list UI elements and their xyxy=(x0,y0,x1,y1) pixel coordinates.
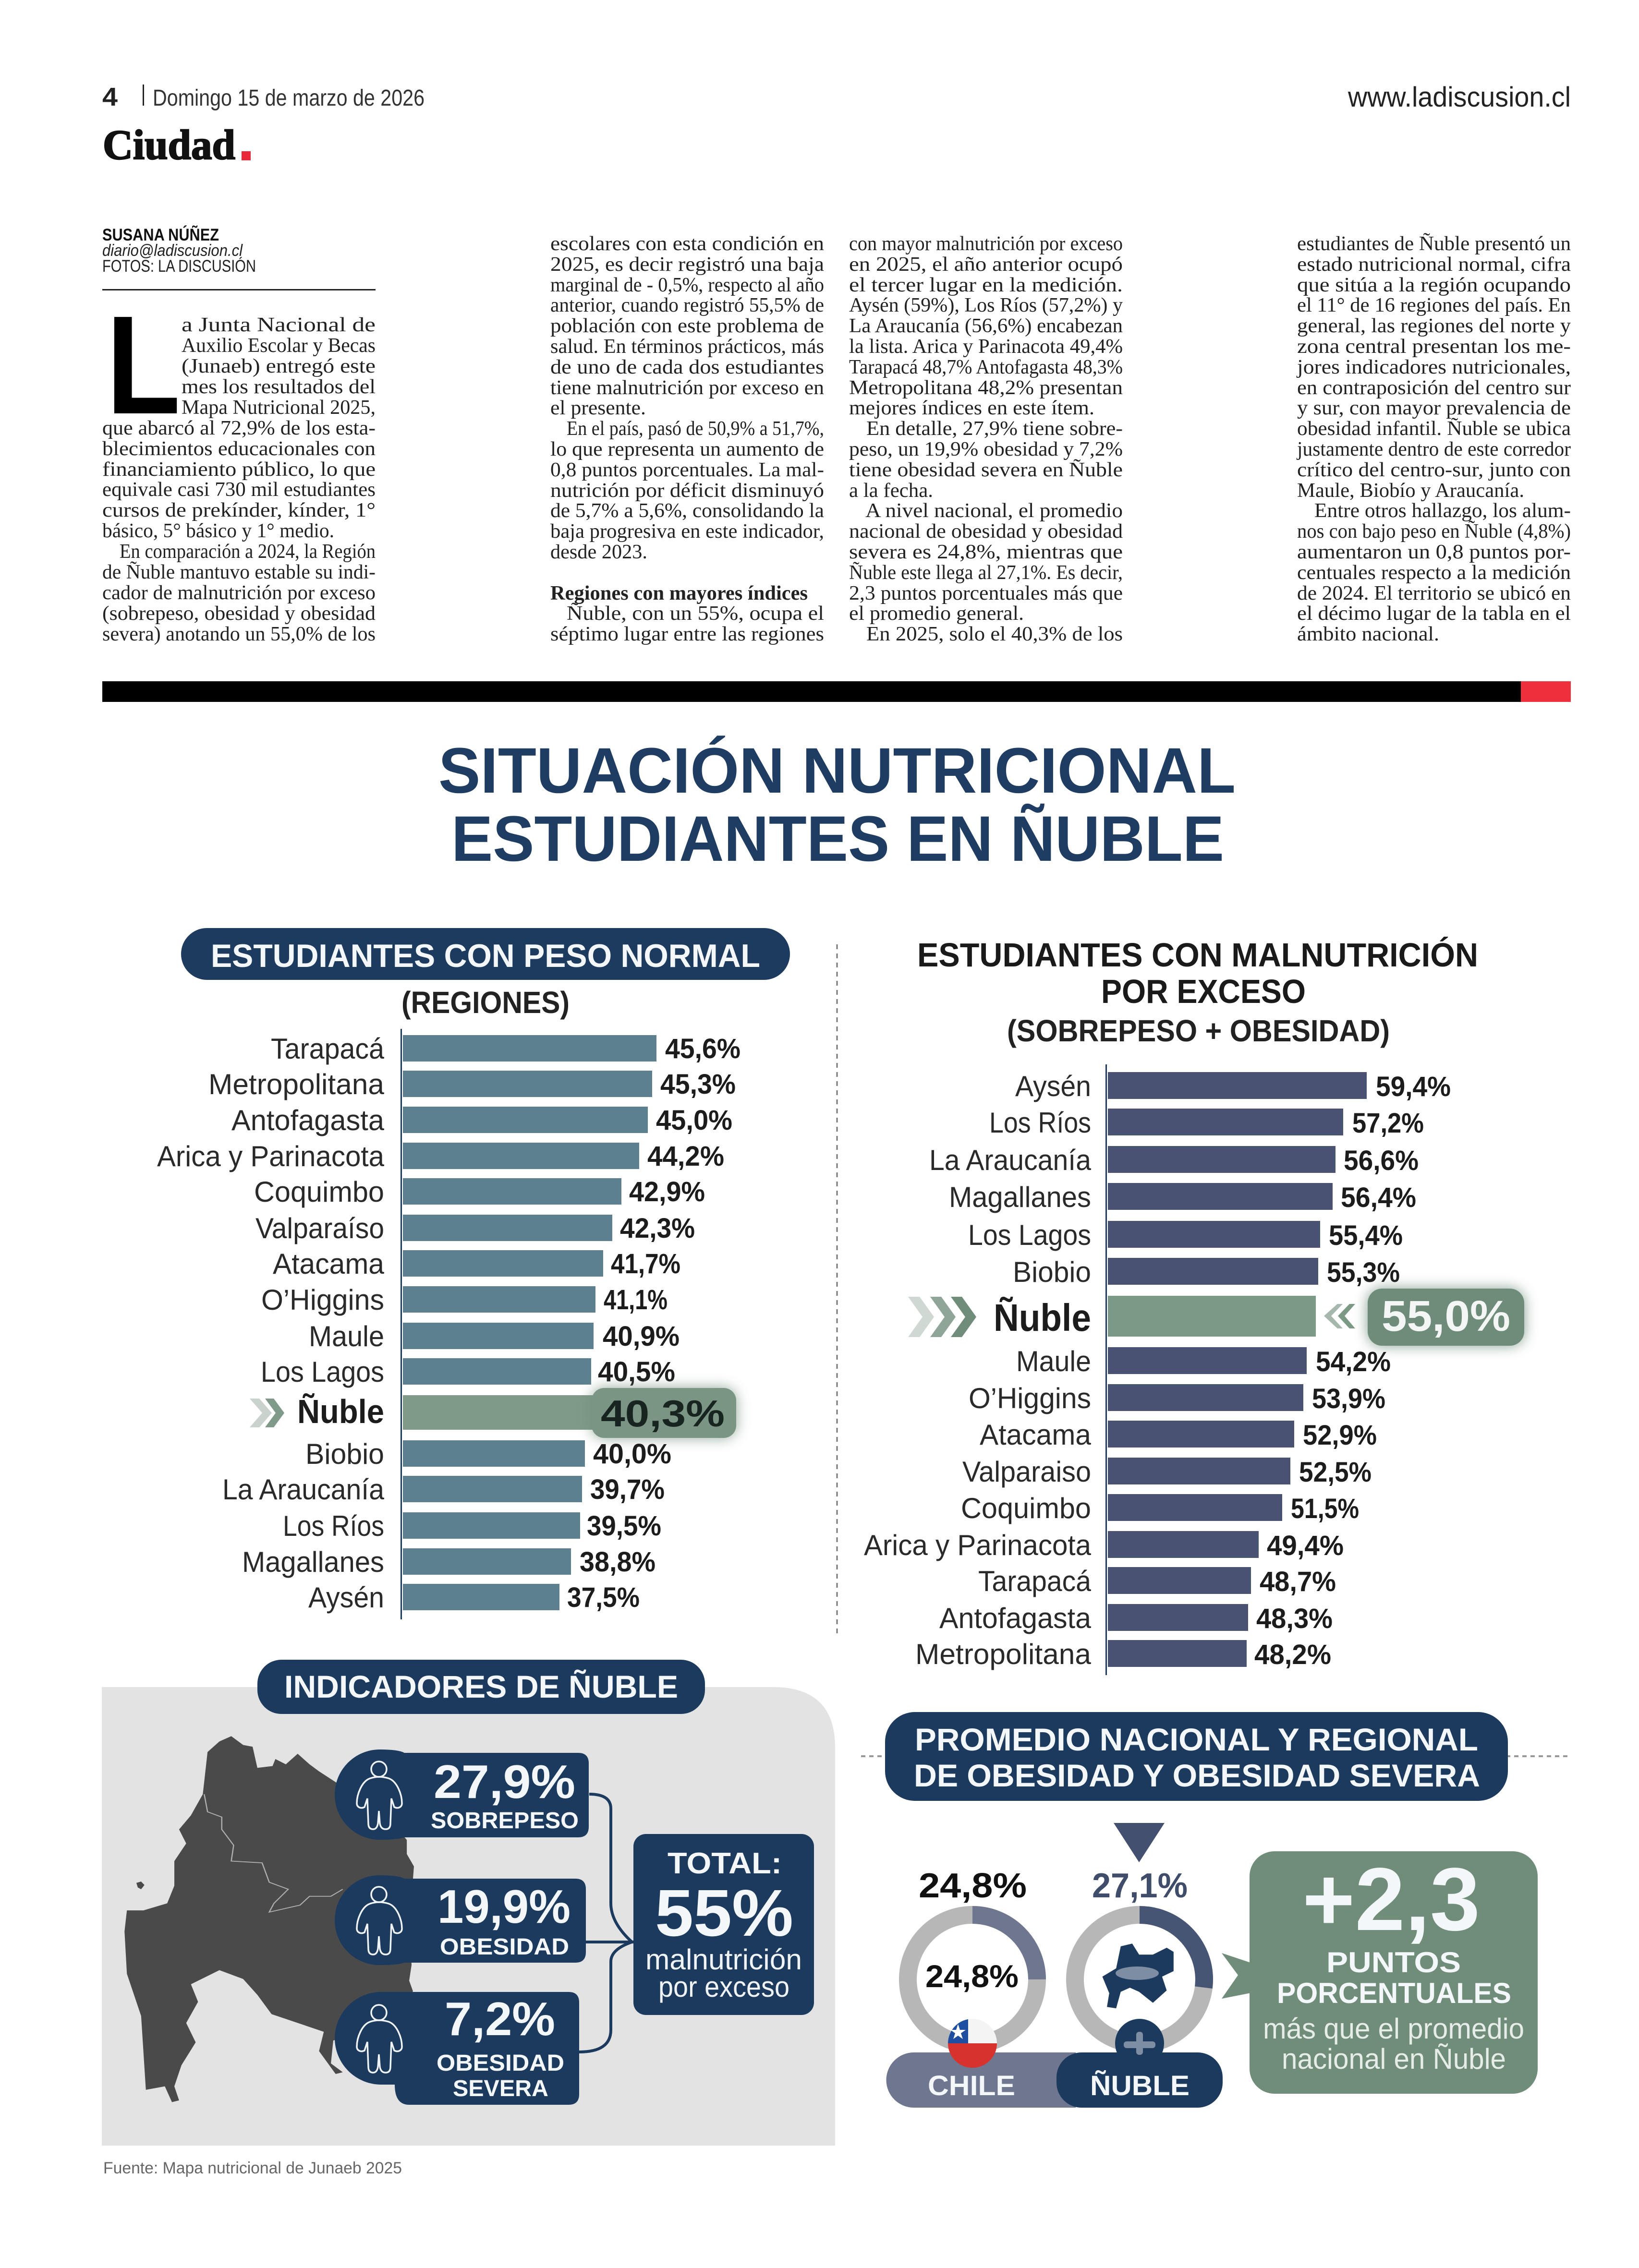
donut: Chile: 24,8% xyxy=(925,1958,1019,1994)
article column 3: severa es 24,8%, mientras que xyxy=(849,541,1123,563)
article column 2: anterior, cuando registró 55,5% de xyxy=(550,294,824,316)
bar: Biobio xyxy=(305,1438,671,1470)
bottom label pills: ÑUBLE xyxy=(1090,2070,1190,2101)
indicator: obesidad severa xyxy=(335,1992,579,2105)
bar: La Araucanía: La Araucanía xyxy=(929,1144,1092,1176)
bar: Biobio: Biobio xyxy=(305,1438,384,1470)
article column 3: el tercer lugar en la medición. xyxy=(849,274,1123,296)
indicator: obesidad xyxy=(335,1875,586,1965)
panel: estudiantes con malnutrición por exceso xyxy=(864,936,1524,1675)
article column 1: cursos de prekínder, kínder, 1° xyxy=(102,499,376,521)
publication date: Domingo 15 de marzo de 2026 xyxy=(153,85,425,111)
heading: POR EXCESO xyxy=(1101,973,1306,1010)
article column 1: financiamiento público, lo que xyxy=(102,458,376,481)
page header xyxy=(102,82,1571,169)
total box: malnutrición xyxy=(645,1943,802,1976)
article column 3: 2,3 puntos porcentuales más que xyxy=(849,582,1123,604)
bar: Aysén xyxy=(1015,1070,1451,1102)
bar: Coquimbo: Coquimbo xyxy=(961,1492,1091,1524)
bar: La Araucanía: La Araucanía xyxy=(222,1473,385,1506)
bar: Los Ríos xyxy=(283,1510,661,1542)
bar: Tarapacá: 48,7% xyxy=(1260,1566,1336,1597)
article column 4: centuales respecto a la medición xyxy=(1297,562,1571,584)
bar: Tarapacá xyxy=(271,1033,741,1065)
bar: Los Lagos: 55,4% xyxy=(1329,1220,1403,1251)
indicator: obesidad: 19,9% xyxy=(437,1880,571,1933)
bar: Coquimbo xyxy=(961,1492,1359,1524)
bar: Valparaíso: 42,3% xyxy=(620,1213,695,1244)
article column 2: 0,8 puntos porcentuales. La mal- xyxy=(550,459,824,481)
bar: Magallanes: Magallanes xyxy=(242,1546,384,1578)
bar: Los Lagos: Los Lagos xyxy=(968,1219,1091,1251)
icon: obese person xyxy=(357,1887,402,1954)
article column 3: peso, un 19,9% obesidad y 7,2% xyxy=(849,438,1123,460)
article column 3: Tarapacá 48,7% Antofagasta 48,3% xyxy=(849,356,1123,378)
panel: indicadores de Ñuble xyxy=(102,1660,835,2146)
bar: Atacama: Atacama xyxy=(273,1248,385,1280)
heading pill xyxy=(257,1660,705,1714)
byline: diario@ladiscusion.cl xyxy=(102,241,243,260)
article column 1: a Junta Nacional de xyxy=(182,314,376,336)
bar: Magallanes xyxy=(242,1546,656,1578)
article column 1: que abarcó al 72,9% de los esta- xyxy=(102,417,376,439)
highlighted bar: Ñuble: 40,3% xyxy=(601,1392,725,1435)
bar: Magallanes: 56,4% xyxy=(1341,1182,1416,1213)
section title: Ciudad: Ciudad xyxy=(103,122,235,169)
bar: Biobio: 55,3% xyxy=(1327,1257,1400,1288)
total box: por exceso xyxy=(658,1971,789,2003)
highlighted bar: Ñuble: 55,0% xyxy=(1382,1292,1510,1340)
byline: FOTOS: LA DISCUSIÓN xyxy=(102,257,256,276)
bar: Arica y Parinacota: Arica y Parinacota xyxy=(157,1140,385,1172)
bar: Antofagasta xyxy=(231,1104,732,1136)
article column 4: zona central presentan los me- xyxy=(1297,336,1571,358)
article column 2: marginal de - 0,5%, respecto al año xyxy=(550,274,824,296)
article column 4 xyxy=(1296,233,1571,645)
article column 2: de 5,7% a 5,6%, consolidando la xyxy=(550,500,824,522)
article column 3: En 2025, solo el 40,3% de los xyxy=(866,623,1123,645)
bar: Coquimbo: 42,9% xyxy=(629,1176,705,1207)
article column 3: con mayor malnutrición por exceso xyxy=(849,233,1123,255)
bar: Tarapacá: Tarapacá xyxy=(271,1033,385,1065)
bar: Los Ríos xyxy=(989,1107,1424,1139)
article column 1 xyxy=(102,287,376,645)
bar: Los Lagos: 40,5% xyxy=(598,1356,675,1387)
heading: (SOBREPESO + OBESIDAD) xyxy=(1007,1013,1390,1048)
article column 4: el décimo lugar de la tabla en el xyxy=(1297,603,1571,625)
bar: Antofagasta xyxy=(939,1602,1333,1634)
article column 4: en contraposición del centro sur xyxy=(1297,377,1571,399)
bar: Valparaíso: Valparaíso xyxy=(255,1212,384,1244)
page number: 4 xyxy=(102,83,118,111)
bar: Maule xyxy=(1016,1345,1391,1377)
heading pill: INDICADORES DE ÑUBLE xyxy=(284,1669,678,1704)
connector lines xyxy=(579,1794,634,2052)
article column 2: séptimo lugar entre las regiones xyxy=(550,623,824,645)
article column 3: mejores índices en este ítem. xyxy=(849,397,1094,419)
subheading: (REGIONES) xyxy=(401,985,570,1020)
bar: Aysén: Aysén xyxy=(308,1581,384,1614)
icon: Ñuble emblem xyxy=(1115,2019,1164,2068)
bar: Maule: 40,9% xyxy=(603,1321,680,1352)
article column 2: desde 2023. xyxy=(550,541,647,563)
website: www.ladiscusion.cl xyxy=(1348,82,1571,113)
total box: TOTAL: xyxy=(668,1847,782,1880)
article column 4: ámbito nacional. xyxy=(1297,623,1439,645)
infographic title: ESTUDIANTES EN ÑUBLE xyxy=(451,803,1224,875)
bar: Biobio xyxy=(1013,1256,1400,1288)
bar: Arica y Parinacota xyxy=(864,1529,1344,1561)
heading pill: DE OBESIDAD Y OBESIDAD SEVERA xyxy=(914,1758,1480,1793)
bar: Metropolitana: 48,2% xyxy=(1254,1639,1331,1670)
article column 1: mes los resultados del xyxy=(182,376,376,398)
bar: Aysén: 59,4% xyxy=(1376,1071,1451,1102)
bar: Metropolitana: 45,3% xyxy=(660,1069,736,1100)
bar: Los Lagos xyxy=(968,1219,1403,1251)
article column 2: nutrición por déficit disminuyó xyxy=(550,480,824,502)
bottom label pills: CHILE xyxy=(928,2070,1015,2101)
article column 2: 2025, es decir registró una baja xyxy=(550,253,824,276)
article column 2: Ñuble, con un 55%, ocupa el xyxy=(567,603,824,625)
callout: +2,3 puntos porcentuales: +2,3 xyxy=(1302,1850,1480,1949)
heading: ESTUDIANTES CON MALNUTRICIÓN xyxy=(917,936,1478,974)
bar: Maule: Maule xyxy=(309,1320,384,1352)
bar: La Araucanía xyxy=(222,1473,665,1506)
callout: +2,3 puntos porcentuales: nacional en Ñuble xyxy=(1282,2043,1506,2075)
article column 1: básico, 5° básico y 1° medio. xyxy=(102,520,334,542)
article column 1: (Junaeb) entregó este xyxy=(182,355,376,377)
subheading: Regiones con mayores índices xyxy=(550,582,808,604)
article column 1: de Ñuble mantuvo estable su indi- xyxy=(102,561,376,583)
source note: Fuente: Mapa nutricional de Junaeb 2025 xyxy=(103,2159,402,2177)
bar: Los Ríos: Los Ríos xyxy=(989,1107,1091,1139)
donut: Chile xyxy=(908,1867,1037,2068)
article column 3: La Araucanía (56,6%) encabezan xyxy=(849,315,1123,337)
indicator: obesidad: OBESIDAD xyxy=(440,1934,569,1960)
article column 4: estado nutricional normal, cifra xyxy=(1297,253,1571,276)
bar: Los Lagos xyxy=(261,1356,675,1388)
bar: Coquimbo: 51,5% xyxy=(1291,1493,1359,1524)
byline: SUSANA NÚÑEZ xyxy=(102,225,219,244)
article column 1: Auxilio Escolar y Becas xyxy=(182,335,376,357)
article column 3: Metropolitana 48,2% presentan xyxy=(849,377,1123,399)
article column 1: severa) anotando un 55,0% de los xyxy=(102,623,376,645)
callout: +2,3 puntos porcentuales xyxy=(1222,1850,1538,2094)
article column 3: en 2025, el año anterior ocupó xyxy=(849,253,1123,276)
bar: Tarapacá xyxy=(978,1565,1336,1597)
article column 3: el promedio general. xyxy=(849,603,1024,625)
bar: Magallanes: 38,8% xyxy=(580,1546,656,1578)
section divider bar xyxy=(102,681,1571,702)
bar: O'Higgins: O’Higgins xyxy=(969,1382,1091,1414)
bar: Aysén: 37,5% xyxy=(567,1582,640,1613)
bar: O'Higgins: O’Higgins xyxy=(261,1284,384,1316)
bar: Valparaiso xyxy=(962,1456,1372,1488)
total box: 55% xyxy=(655,1876,793,1950)
heading pill: PROMEDIO NACIONAL Y REGIONAL xyxy=(915,1722,1478,1757)
article column 3: nacional de obesidad y obesidad xyxy=(849,520,1123,543)
icon: Chile flag xyxy=(948,2019,997,2068)
bar: Los Ríos: Los Ríos xyxy=(283,1510,384,1542)
bar: Biobio: Biobio xyxy=(1013,1256,1091,1288)
article column 4: estudiantes de Ñuble presentó un xyxy=(1297,233,1571,255)
bar: La Araucanía: 56,6% xyxy=(1344,1145,1419,1176)
bar: Magallanes: Magallanes xyxy=(949,1181,1091,1213)
bar: Antofagasta: 45,0% xyxy=(656,1105,732,1136)
article column 2: el presente. xyxy=(550,397,646,419)
bottom label pills xyxy=(886,2052,1223,2108)
bar: Arica y Parinacota: 44,2% xyxy=(647,1141,724,1172)
bar: Metropolitana: Metropolitana xyxy=(915,1638,1092,1670)
article column 1: cador de malnutrición por exceso xyxy=(102,582,376,604)
bar: Coquimbo: Coquimbo xyxy=(254,1176,384,1208)
panel: estudiantes con peso normal xyxy=(157,928,790,1619)
article column 4: general, las regiones del norte y xyxy=(1297,315,1571,337)
article column 3: a la fecha. xyxy=(849,480,933,502)
infographic title xyxy=(438,735,1236,875)
article column 4: Maule, Biobío y Araucanía. xyxy=(1297,480,1524,502)
bar: Aysén: Aysén xyxy=(1015,1070,1091,1102)
article column 4: aumentaron un 0,8 puntos por- xyxy=(1297,541,1571,563)
article column 4: el 11° de 16 regiones del país. En xyxy=(1297,294,1571,316)
bar: Arica y Parinacota xyxy=(157,1140,724,1172)
bar: Biobio: 40,0% xyxy=(593,1438,671,1470)
bar: Atacama: 41,7% xyxy=(611,1248,680,1279)
drop cap: L xyxy=(106,287,181,443)
bar: Tarapacá: 45,6% xyxy=(665,1033,741,1064)
article column 3: En detalle, 27,9% tiene sobre- xyxy=(866,418,1123,440)
article column 2: baja progresiva en este indicador, xyxy=(550,520,824,543)
bar: Antofagasta: Antofagasta xyxy=(939,1602,1092,1634)
article column 4: que sitúa a la región ocupando xyxy=(1297,274,1571,296)
bar: La Araucanía xyxy=(929,1144,1419,1176)
bar: Atacama: Atacama xyxy=(980,1419,1092,1451)
indicator: obesidad severa: OBESIDAD xyxy=(437,2051,564,2076)
donut: Ñuble: 27,1% xyxy=(1092,1867,1188,1905)
icon: overweight person xyxy=(357,1761,402,1829)
article column 4: justamente dentro de este corredor xyxy=(1296,438,1571,460)
bar: Maule: Maule xyxy=(1016,1345,1091,1377)
panel: promedio nacional y regional xyxy=(861,1712,1569,2108)
bar: Coquimbo xyxy=(254,1176,705,1208)
article column 2: lo que representa un aumento de xyxy=(550,438,824,460)
bar: Metropolitana: Metropolitana xyxy=(208,1068,385,1100)
bar: O'Higgins: 53,9% xyxy=(1312,1383,1385,1414)
bar: O'Higgins: 41,1% xyxy=(604,1284,668,1315)
indicator: sobrepeso xyxy=(335,1749,589,1840)
bar: Metropolitana xyxy=(208,1068,736,1100)
bar: Atacama xyxy=(980,1419,1377,1451)
bar: Los Lagos: Los Lagos xyxy=(261,1356,384,1388)
article column 2: población con este problema de xyxy=(550,315,824,337)
bar: Maule xyxy=(309,1320,680,1352)
callout: +2,3 puntos porcentuales: más que el promedio xyxy=(1263,2013,1524,2045)
bar: Los Ríos: 39,5% xyxy=(587,1510,661,1542)
icon: severely obese person xyxy=(357,2005,402,2073)
bar: Los Ríos: 57,2% xyxy=(1352,1108,1424,1139)
article column 4: y sur, con mayor prevalencia de xyxy=(1297,397,1571,419)
article column 4: nos con bajo peso en Ñuble (4,8%) xyxy=(1297,520,1571,543)
bar: Antofagasta: 48,3% xyxy=(1256,1603,1333,1634)
article column 2: tiene malnutrición por exceso en xyxy=(550,377,824,399)
article column 4: crítico del centro-sur, junto con xyxy=(1297,459,1571,481)
heading pill xyxy=(181,928,790,980)
bar: Valparaiso: 52,5% xyxy=(1299,1457,1372,1488)
article column 3: Aysén (59%), Los Ríos (57,2%) y xyxy=(849,294,1123,316)
bar: O'Higgins xyxy=(261,1284,668,1316)
article column 4: jores indicadores nutricionales, xyxy=(1296,356,1571,378)
article column 2: salud. En términos prácticos, más xyxy=(550,336,824,358)
article column 1: equivale casi 730 mil estudiantes xyxy=(102,479,376,501)
article column 2: de uno de cada dos estudiantes xyxy=(550,356,824,378)
article column 1: Mapa Nutricional 2025, xyxy=(182,397,376,419)
article column 3: la lista. Arica y Parinacota 49,4% xyxy=(849,336,1123,358)
article column 4: de 2024. El territorio se ubicó en xyxy=(1297,582,1571,604)
bar: Atacama: 52,9% xyxy=(1303,1420,1377,1451)
arrow: pointing to Ñuble xyxy=(1114,1823,1165,1862)
callout: +2,3 puntos porcentuales: PUNTOS xyxy=(1326,1946,1461,1978)
bar: Atacama xyxy=(273,1248,680,1280)
bar: Valparaíso xyxy=(255,1212,695,1244)
article column 1: En comparación a 2024, la Región xyxy=(120,541,376,563)
article column 3: A nivel nacional, el promedio xyxy=(865,500,1123,522)
article column 3: tiene obesidad severa en Ñuble xyxy=(849,459,1123,481)
article column 2: escolares con esta condición en xyxy=(550,233,824,255)
bar: Antofagasta: Antofagasta xyxy=(231,1104,385,1136)
article column 4: Entre otros hallazgo, los alum- xyxy=(1314,500,1571,522)
article column 1: blecimientos educacionales con xyxy=(102,438,376,460)
article column 2: En el país, pasó de 50,9% a 51,7%, xyxy=(567,418,824,440)
bar: Maule: 54,2% xyxy=(1316,1346,1391,1377)
bar: La Araucanía: 39,7% xyxy=(590,1474,665,1505)
byline xyxy=(102,225,376,290)
highlighted bar: Ñuble: Ñuble xyxy=(994,1296,1091,1339)
article column 4: obesidad infantil. Ñuble se ubica xyxy=(1297,418,1571,440)
bar: Tarapacá: Tarapacá xyxy=(978,1565,1092,1597)
donut: Ñuble xyxy=(1075,1867,1204,2068)
donut: Chile: 24,8% xyxy=(919,1867,1027,1905)
bar: O'Higgins xyxy=(969,1382,1385,1414)
heading xyxy=(917,936,1478,1048)
grey background panel xyxy=(102,1687,835,2146)
bar: Magallanes xyxy=(949,1181,1416,1213)
article column 3: Ñuble este llega al 27,1%. Es decir, xyxy=(849,562,1123,584)
map of Ñuble region xyxy=(124,1736,414,2102)
heading pill xyxy=(885,1712,1508,1801)
indicator: obesidad severa: 7,2% xyxy=(445,1992,555,2045)
total box xyxy=(633,1834,814,2015)
infographic title: SITUACIÓN NUTRICIONAL xyxy=(438,735,1236,807)
highlighted bar: Ñuble xyxy=(250,1388,736,1438)
indicator: sobrepeso: SOBREPESO xyxy=(431,1808,579,1834)
bar: Valparaiso: Valparaiso xyxy=(962,1456,1091,1488)
callout: +2,3 puntos porcentuales: PORCENTUALES xyxy=(1277,1977,1511,2009)
indicator: sobrepeso: 27,9% xyxy=(434,1755,575,1808)
icon: Ñuble region map xyxy=(1102,1943,1174,2008)
article column 2 xyxy=(550,233,824,645)
indicator: obesidad severa: SEVERA xyxy=(453,2076,548,2101)
article column 1: (sobrepeso, obesidad y obesidad xyxy=(102,603,376,625)
bar: Arica y Parinacota: 49,4% xyxy=(1267,1530,1344,1561)
bar: Aysén xyxy=(308,1581,640,1614)
heading pill: ESTUDIANTES CON PESO NORMAL xyxy=(211,938,760,974)
bar: Arica y Parinacota: Arica y Parinacota xyxy=(864,1529,1092,1561)
article column 3 xyxy=(849,233,1123,645)
bar: Metropolitana xyxy=(915,1638,1331,1670)
highlighted bar: Ñuble: Ñuble xyxy=(297,1393,384,1430)
highlighted bar: Ñuble xyxy=(908,1289,1524,1346)
